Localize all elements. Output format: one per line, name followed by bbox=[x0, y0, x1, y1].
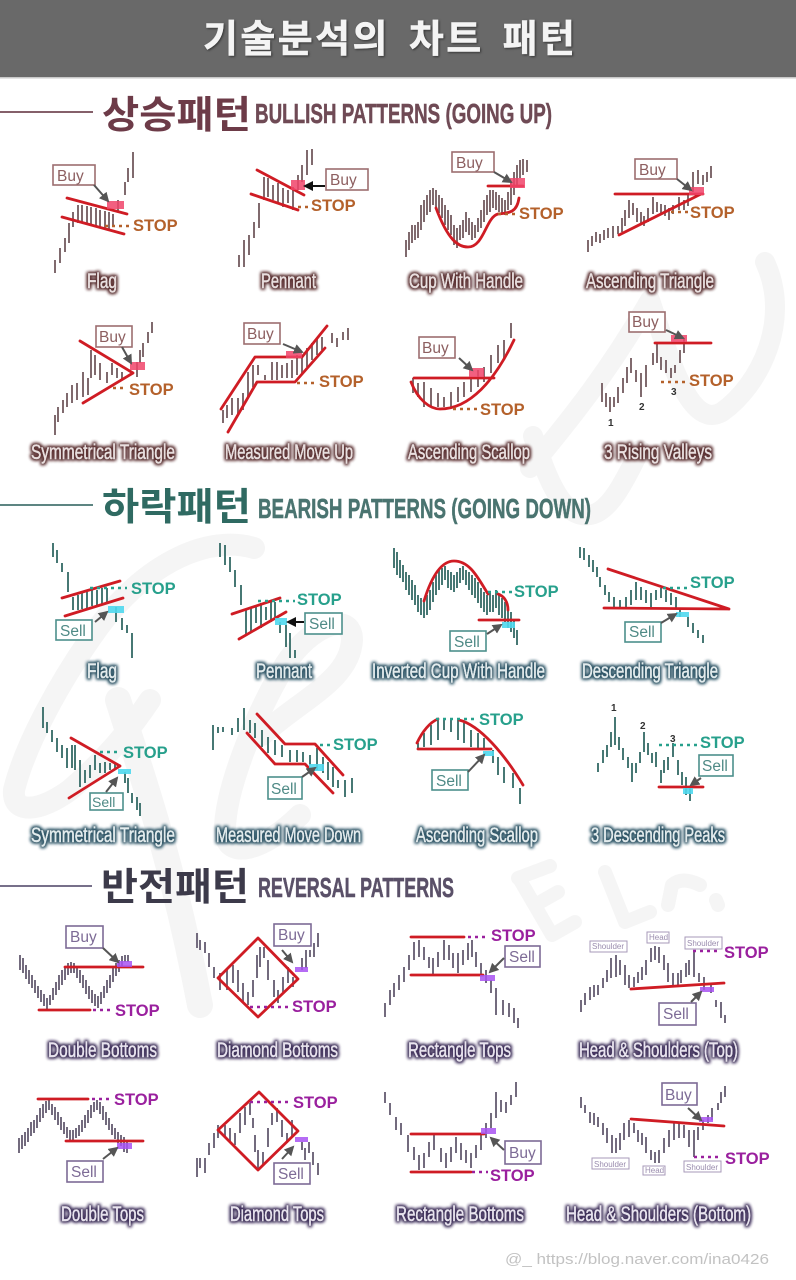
section heading: bullish patterns bbox=[0, 95, 552, 137]
panel: bearish patterns bbox=[31, 543, 745, 847]
chart: Head & Shoulders (Bottom) bbox=[566, 1083, 770, 1226]
chart: Flag: STOP bbox=[133, 217, 178, 235]
chart: Pennant: Pennant bbox=[256, 660, 312, 683]
chart: Ascending Scallop: Ascending Scallop bbox=[408, 441, 530, 464]
chart: Head & Shoulders (Top) bbox=[579, 932, 769, 1062]
section heading: reversal patterns: REVERSAL PATTERNS bbox=[258, 872, 454, 903]
chart: Ascending Scallop: Sell bbox=[436, 773, 462, 790]
chart: Diamond Tops bbox=[197, 1092, 338, 1226]
chart: Head & Shoulders (Bottom): STOP bbox=[725, 1150, 770, 1168]
section heading: reversal patterns bbox=[0, 867, 454, 909]
section heading: bearish patterns: 하락패턴 bbox=[102, 487, 251, 529]
chart: Head & Shoulders (Top): Sell bbox=[663, 1006, 689, 1023]
chart: Head & Shoulders (Bottom): Shoulder bbox=[686, 1163, 718, 1172]
chart: Measured Move Up: Buy bbox=[247, 326, 274, 343]
chart: Diamond Tops: STOP bbox=[293, 1094, 338, 1112]
chart: Head & Shoulders (Top): Shoulder bbox=[592, 942, 624, 951]
chart: Ascending Triangle bbox=[586, 159, 735, 293]
chart: 3 Rising Valleys: 3 Rising Valleys bbox=[604, 441, 712, 464]
title: 기술분석의 차트 패턴 bbox=[203, 19, 575, 61]
chart: Ascending Scallop bbox=[408, 323, 530, 464]
title bar bbox=[0, 0, 796, 78]
chart: Measured Move Up bbox=[221, 323, 364, 464]
chart: Double Tops bbox=[19, 1091, 159, 1226]
chart: Head & Shoulders (Bottom): Shoulder bbox=[594, 1160, 626, 1169]
chart: Symmetrical Triangle: Buy bbox=[99, 329, 126, 346]
chart: Pennant: STOP bbox=[297, 591, 342, 609]
chart: 3 Descending Peaks: 1 bbox=[611, 703, 617, 714]
chart: Measured Move Down: Measured Move Down bbox=[216, 824, 361, 847]
chart: Ascending Scallop: Buy bbox=[422, 340, 449, 357]
panel: reversal patterns bbox=[19, 924, 770, 1226]
chart: Symmetrical Triangle: STOP bbox=[123, 744, 168, 762]
chart: Flag bbox=[53, 152, 178, 293]
chart: 3 Rising Valleys: 3 bbox=[671, 387, 677, 398]
chart: Measured Move Down bbox=[213, 708, 378, 847]
chart: 3 Rising Valleys: STOP bbox=[689, 372, 734, 390]
chart: 3 Rising Valleys: 1 bbox=[608, 418, 614, 429]
chart: Descending Triangle: STOP bbox=[690, 574, 735, 592]
chart: Double Bottoms: Buy bbox=[70, 929, 97, 946]
chart: 3 Rising Valleys: 2 bbox=[639, 402, 645, 413]
section heading: bullish patterns: 상승패턴 bbox=[102, 95, 251, 137]
chart: Symmetrical Triangle: Symmetrical Triangle bbox=[31, 441, 175, 464]
chart: Ascending Triangle: STOP bbox=[690, 204, 735, 222]
chart: Symmetrical Triangle bbox=[31, 322, 175, 464]
panel: bullish patterns bbox=[31, 149, 735, 464]
chart: Inverted Cup With Handle: Inverted Cup With Handle bbox=[372, 660, 545, 683]
chart: Ascending Scallop: STOP bbox=[480, 401, 525, 419]
chart: Measured Move Up: Measured Move Up bbox=[225, 441, 353, 464]
chart: Rectangle Bottoms: Buy bbox=[509, 1145, 536, 1162]
chart: Measured Move Down: STOP bbox=[333, 736, 378, 754]
chart: 3 Descending Peaks: Sell bbox=[702, 758, 728, 775]
chart: Head & Shoulders (Top): STOP bbox=[724, 944, 769, 962]
chart: Descending Triangle: Descending Triangle bbox=[582, 660, 718, 683]
chart: Rectangle Tops bbox=[385, 927, 540, 1062]
chart: Ascending Scallop: Ascending Scallop bbox=[416, 824, 538, 847]
chart: Double Bottoms: STOP bbox=[115, 1002, 160, 1020]
section heading: bearish patterns: BEARISH PATTERNS (GOING DOWN) bbox=[258, 493, 591, 524]
chart: 3 Descending Peaks bbox=[591, 703, 745, 847]
chart: Double Bottoms bbox=[20, 926, 160, 1062]
chart: 3 Descending Peaks: 3 bbox=[670, 734, 676, 745]
chart: Ascending Triangle: Buy bbox=[639, 162, 666, 179]
chart: Flag: Buy bbox=[57, 168, 84, 185]
chart: Head & Shoulders (Top): Head bbox=[649, 933, 668, 942]
chart: Rectangle Bottoms: STOP bbox=[490, 1167, 535, 1185]
chart: Double Tops: Sell bbox=[71, 1164, 97, 1181]
chart: 3 Rising Valleys: Buy bbox=[632, 314, 659, 331]
section heading: bullish patterns: BULLISH PATTERNS (GOING UP) bbox=[255, 98, 552, 129]
chart: Measured Move Up: STOP bbox=[319, 373, 364, 391]
chart: Inverted Cup With Handle bbox=[372, 548, 559, 683]
chart: Pennant: Sell bbox=[309, 616, 335, 633]
chart: Double Bottoms: Double Bottoms bbox=[48, 1039, 157, 1062]
chart: Flag: Flag bbox=[87, 660, 117, 683]
chart: Diamond Bottoms bbox=[197, 924, 338, 1062]
chart: Flag: STOP bbox=[131, 580, 176, 598]
chart: Measured Move Down: Sell bbox=[271, 781, 297, 798]
chart: Diamond Bottoms: Diamond Bottoms bbox=[217, 1039, 338, 1062]
chart: Pennant: Buy bbox=[330, 172, 357, 189]
chart: Inverted Cup With Handle: STOP bbox=[514, 583, 559, 601]
chart: Head & Shoulders (Bottom): Head bbox=[645, 1166, 664, 1175]
chart: Flag: Sell bbox=[60, 623, 86, 640]
footer credit: @_ https://blog.naver.com/ina0426 bbox=[505, 1251, 769, 1268]
chart: Flag bbox=[53, 543, 176, 683]
chart: Pennant: STOP bbox=[311, 197, 356, 215]
chart: Rectangle Bottoms bbox=[385, 1082, 541, 1226]
chart: 3 Descending Peaks: 3 Descending Peaks bbox=[591, 824, 725, 847]
chart: Inverted Cup With Handle: Sell bbox=[454, 634, 480, 651]
chart: Cup With Handle: Cup With Handle bbox=[409, 270, 523, 293]
chart: Diamond Bottoms: Buy bbox=[278, 927, 305, 944]
section heading: reversal patterns: 반전패턴 bbox=[101, 867, 249, 909]
chart: Symmetrical Triangle bbox=[31, 707, 175, 847]
chart: Symmetrical Triangle: Sell bbox=[92, 794, 115, 810]
chart: Head & Shoulders (Bottom): Buy bbox=[665, 1087, 692, 1104]
chart: Head & Shoulders (Top): Shoulder bbox=[687, 939, 719, 948]
chart: Ascending Scallop: STOP bbox=[479, 711, 524, 729]
chart: Symmetrical Triangle: STOP bbox=[129, 381, 174, 399]
chart: Ascending Triangle: Ascending Triangle bbox=[586, 270, 714, 293]
section heading: bearish patterns bbox=[0, 487, 591, 529]
chart: 3 Descending Peaks: STOP bbox=[700, 734, 745, 752]
chart: Cup With Handle: STOP bbox=[519, 205, 564, 223]
chart: Pennant: Pennant bbox=[261, 270, 316, 293]
chart: Descending Triangle: Sell bbox=[629, 624, 655, 641]
chart: Symmetrical Triangle: Symmetrical Triangle bbox=[31, 824, 175, 847]
chart: Flag: Flag bbox=[87, 270, 117, 293]
chart: Rectangle Tops: STOP bbox=[491, 927, 536, 945]
chart: Pennant bbox=[220, 543, 342, 683]
chart: Diamond Tops: Sell bbox=[278, 1166, 304, 1183]
chart: Rectangle Tops: Sell bbox=[509, 949, 535, 966]
chart: 3 Rising Valleys bbox=[602, 312, 734, 464]
chart: Ascending Scallop bbox=[416, 711, 538, 847]
chart: Pennant bbox=[239, 149, 368, 293]
chart: Rectangle Tops: Rectangle Tops bbox=[408, 1039, 511, 1062]
chart: Diamond Bottoms: STOP bbox=[292, 998, 337, 1016]
chart: Double Tops: Double Tops bbox=[61, 1203, 144, 1226]
chart: Cup With Handle: Buy bbox=[456, 155, 483, 172]
chart: Diamond Tops: Diamond Tops bbox=[230, 1203, 324, 1226]
chart: Cup With Handle bbox=[406, 152, 564, 293]
chart: Double Tops: STOP bbox=[114, 1091, 159, 1109]
chart: Rectangle Bottoms: Rectangle Bottoms bbox=[396, 1203, 524, 1226]
chart: 3 Descending Peaks: 2 bbox=[640, 721, 646, 732]
chart: Descending Triangle bbox=[580, 547, 735, 683]
